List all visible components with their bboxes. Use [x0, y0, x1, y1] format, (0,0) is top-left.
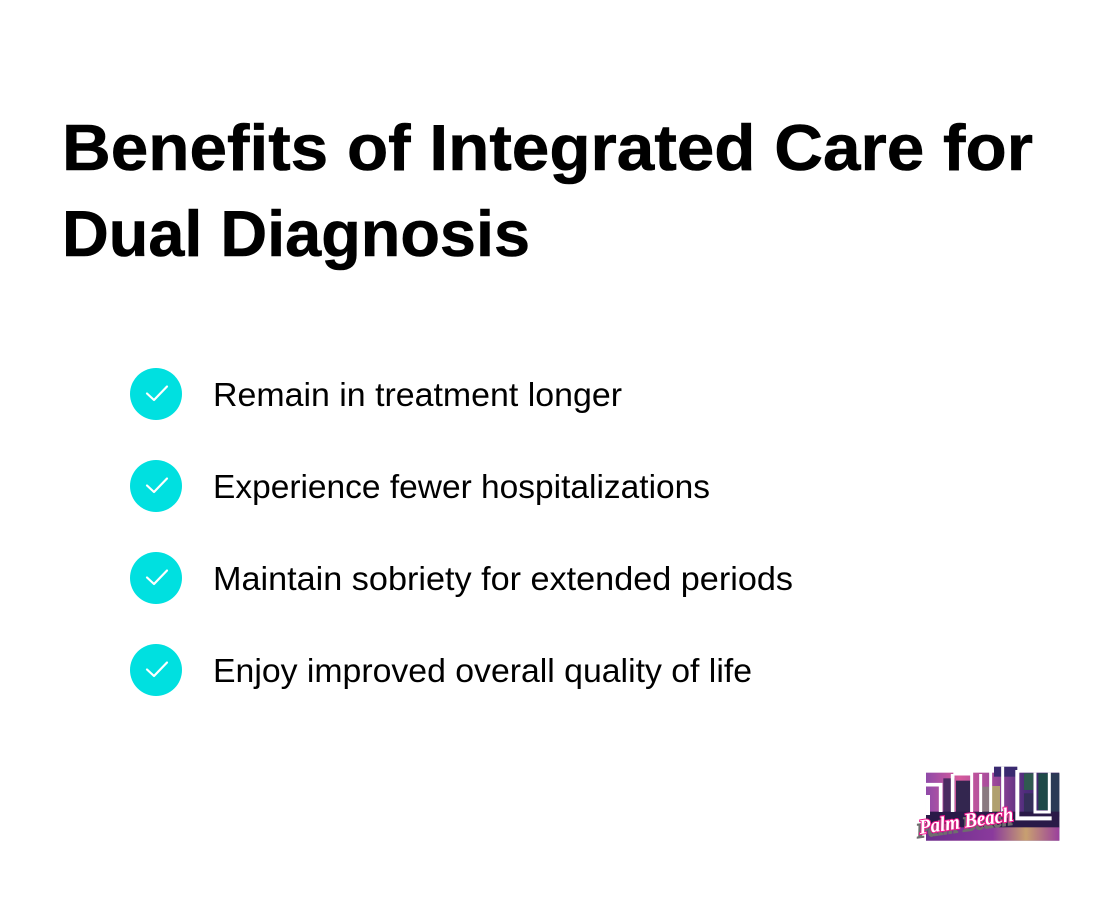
item: maintain sobriety for extended periods — [130, 552, 793, 604]
item: enjoy improved overall quality of life: Enjoy improved overall quality of life — [213, 652, 752, 689]
title: Dual Diagnosis — [62, 197, 530, 270]
logo: Palm Beach: Palm Beach — [914, 808, 1014, 843]
item: remain in treatment longer — [130, 368, 622, 420]
item: remain in treatment longer: Remain in treatment longer — [213, 376, 622, 413]
item: enjoy improved overall quality of life — [130, 644, 752, 696]
item: experience fewer hospitalizations: Experience fewer hospitalizations — [213, 468, 710, 505]
benefits list — [130, 368, 793, 696]
title — [62, 111, 1033, 270]
item: maintain sobriety for extended periods: Maintain sobriety for extended periods — [213, 560, 793, 597]
logo: Palm Beach: Palm Beach — [917, 804, 1015, 839]
logo: Palm Beach — [914, 767, 1059, 843]
title: Benefits of Integrated Care for — [62, 111, 1033, 184]
item: experience fewer hospitalizations — [130, 460, 710, 512]
